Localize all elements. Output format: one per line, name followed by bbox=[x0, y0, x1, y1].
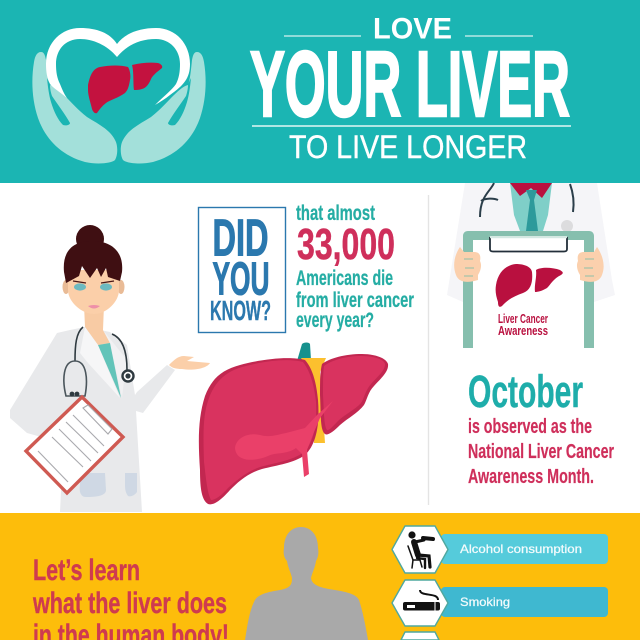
text block: 33,000 statistic: 33,000 bbox=[297, 220, 395, 269]
panel: did you know box: YOU bbox=[212, 252, 270, 304]
item: alcohol consumption: Alcohol consumption bbox=[460, 542, 582, 556]
text block: 33,000 statistic: from liver cancer bbox=[296, 289, 414, 312]
human silhouette bbox=[245, 527, 368, 640]
collar and tie bbox=[510, 183, 552, 231]
doctor coat bbox=[10, 327, 175, 512]
hands bbox=[454, 247, 604, 282]
panel: did you know box: DID bbox=[212, 210, 268, 268]
heading: let's learn bbox=[32, 554, 229, 640]
panel: header bbox=[0, 0, 640, 183]
stethoscope bbox=[64, 327, 134, 396]
item: smoking: Smoking bbox=[460, 595, 510, 609]
divider bbox=[428, 195, 430, 505]
coat pockets bbox=[80, 473, 137, 497]
text block: 33,000 statistic: that almost bbox=[296, 202, 375, 225]
text block: 33,000 statistic: Americans die bbox=[296, 267, 393, 290]
text block: october awareness month: October bbox=[468, 366, 583, 417]
clipboard caption bbox=[498, 312, 548, 338]
text block: october awareness month bbox=[468, 366, 614, 488]
small liver bbox=[496, 264, 563, 307]
illustration: doctor with clipboard bbox=[10, 225, 210, 512]
heading: let's learn: what the liver does bbox=[32, 587, 227, 620]
panel: yellow liver functions section bbox=[0, 513, 640, 640]
panel: did you know box: KNOW? bbox=[210, 295, 271, 326]
doctor hand bbox=[169, 356, 210, 370]
liver vessels bbox=[235, 401, 333, 477]
panel: did you know box bbox=[198, 208, 286, 332]
heading: let's learn: Let’s learn bbox=[33, 554, 140, 587]
icon: heart with hands and liver logo bbox=[32, 28, 206, 163]
text block: october awareness month: Awareness Month. bbox=[468, 466, 594, 488]
item: alcohol consumption bbox=[392, 526, 608, 573]
clipboard caption: Awareness bbox=[498, 324, 548, 338]
doctor neck and face bbox=[62, 270, 127, 398]
subtitle: TO LIVE LONGER bbox=[289, 129, 527, 165]
stethoscope disc bbox=[561, 220, 573, 232]
clipboard caption: Liver Cancer bbox=[498, 312, 548, 326]
title: love: LOVE bbox=[373, 12, 452, 46]
text block: october awareness month: is observed as the bbox=[468, 416, 592, 438]
title rule bbox=[252, 125, 571, 127]
item: smoking bbox=[392, 580, 608, 626]
item: third hexagon bbox=[401, 632, 439, 640]
illustration: doctor holding awareness clipboard bbox=[447, 183, 615, 348]
doctor hair bbox=[64, 225, 122, 283]
stethoscope tubes bbox=[480, 183, 574, 217]
clipboard bbox=[26, 397, 123, 493]
text block: 33,000 statistic: every year? bbox=[296, 309, 374, 332]
icon: cigarette bbox=[403, 590, 440, 610]
pale coat bbox=[447, 183, 615, 345]
icon: person drinking bbox=[408, 531, 433, 568]
text block: 33,000 statistic bbox=[296, 202, 414, 332]
clipboard board bbox=[463, 231, 594, 348]
illustration: large liver bbox=[199, 342, 388, 504]
